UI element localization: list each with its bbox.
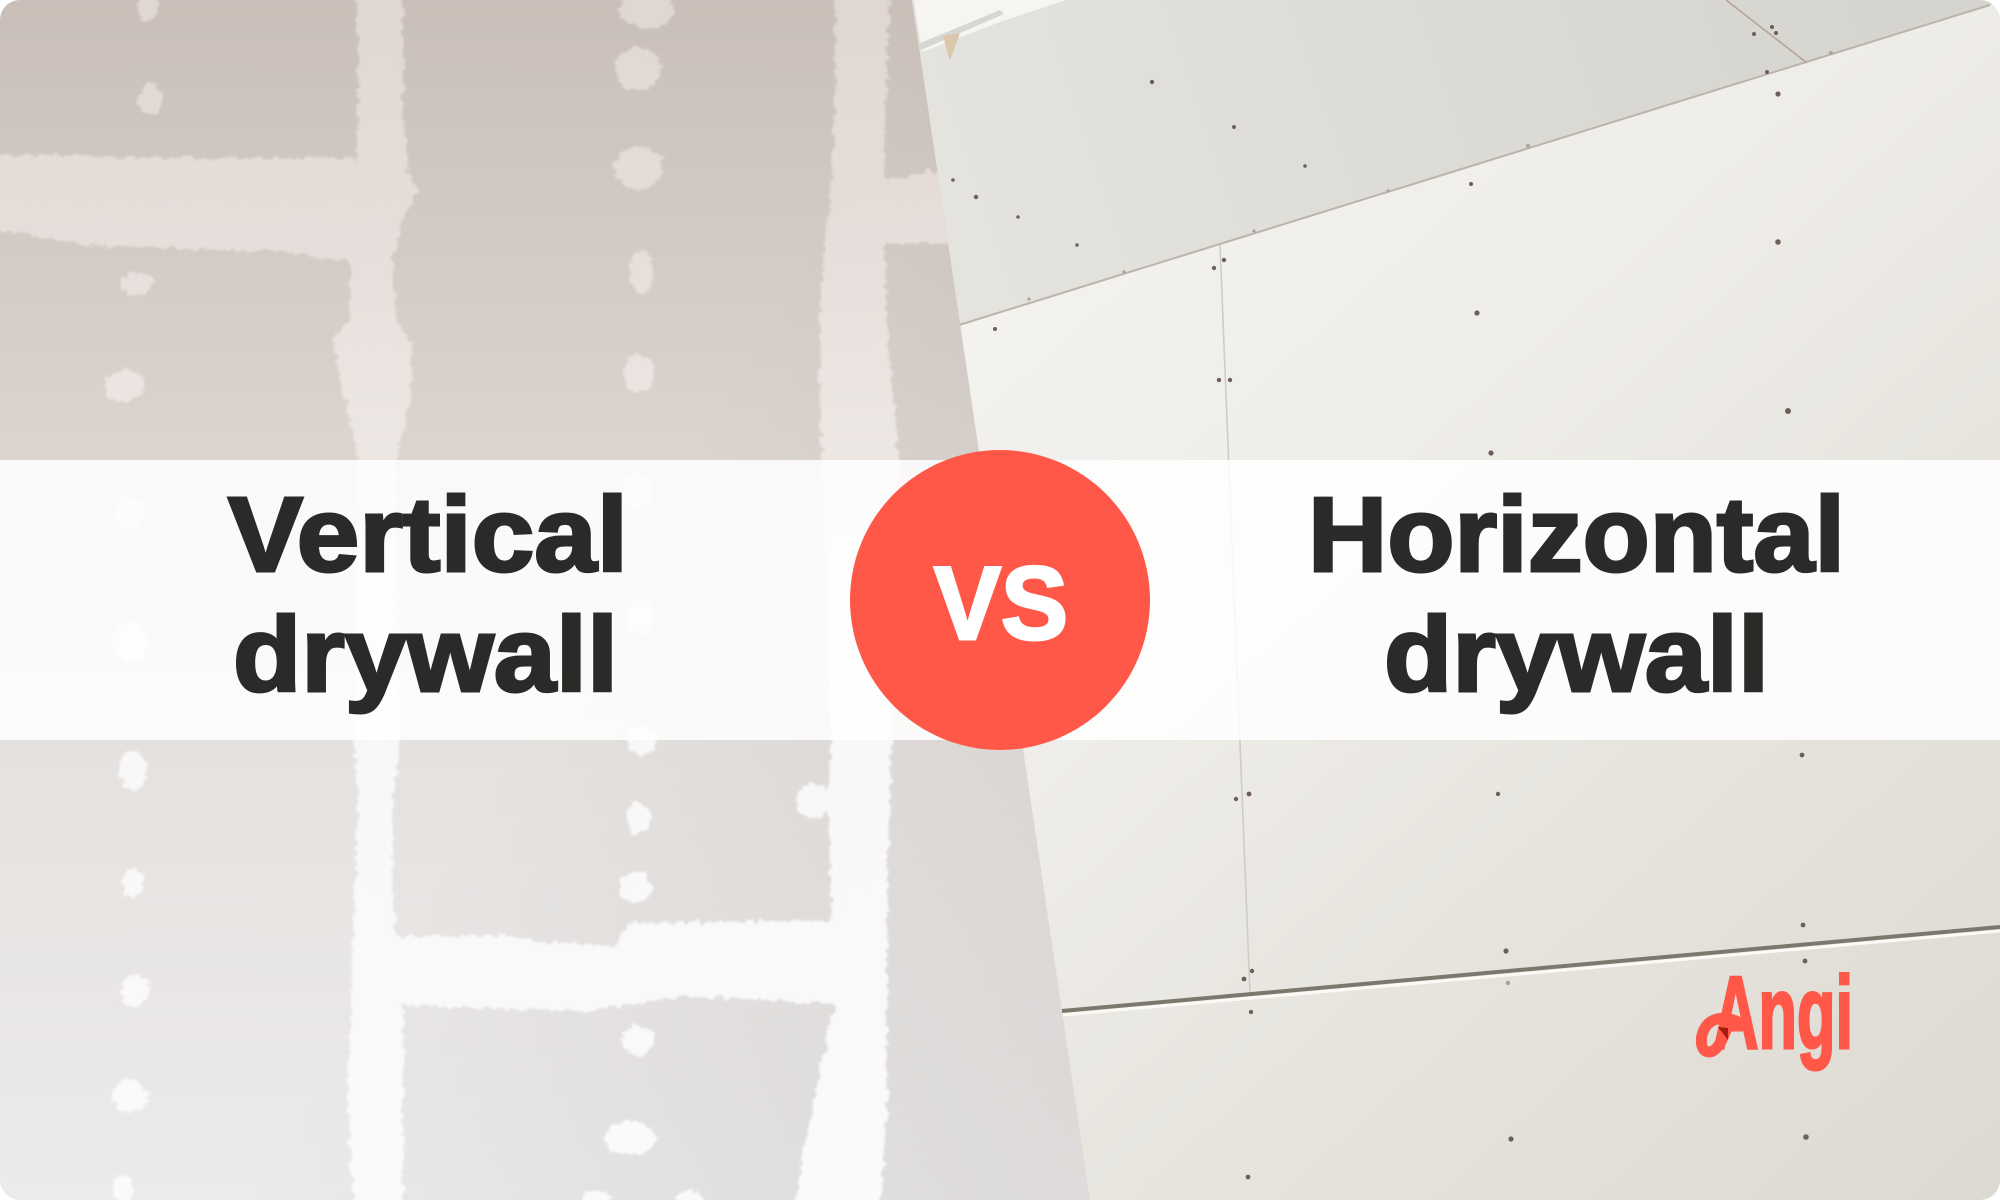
heading: horizontal drywall: drywall [1384,596,1769,714]
heading: horizontal drywall: Horizontal [1308,476,1845,594]
logo: Angi [1701,955,1853,1070]
vs badge: VS [934,546,1068,662]
vs badge [850,450,1150,750]
board seams [959,0,2000,1015]
heading: vertical drywall [228,476,628,714]
heading: horizontal drywall [1308,476,1845,714]
logo: Angi: Angi [1713,955,1853,1070]
panel: horizontal drywall photo [900,0,2000,1200]
heading: vertical drywall: Vertical [228,476,628,594]
heading: vertical drywall: drywall [233,596,618,714]
translucent title band [0,460,2000,740]
panel: vertical drywall photo [0,0,1100,1200]
corner trim [914,0,1066,61]
joint compound seams and screw patches [0,0,960,1200]
screws [951,25,1833,1179]
ceiling board [912,0,2000,325]
